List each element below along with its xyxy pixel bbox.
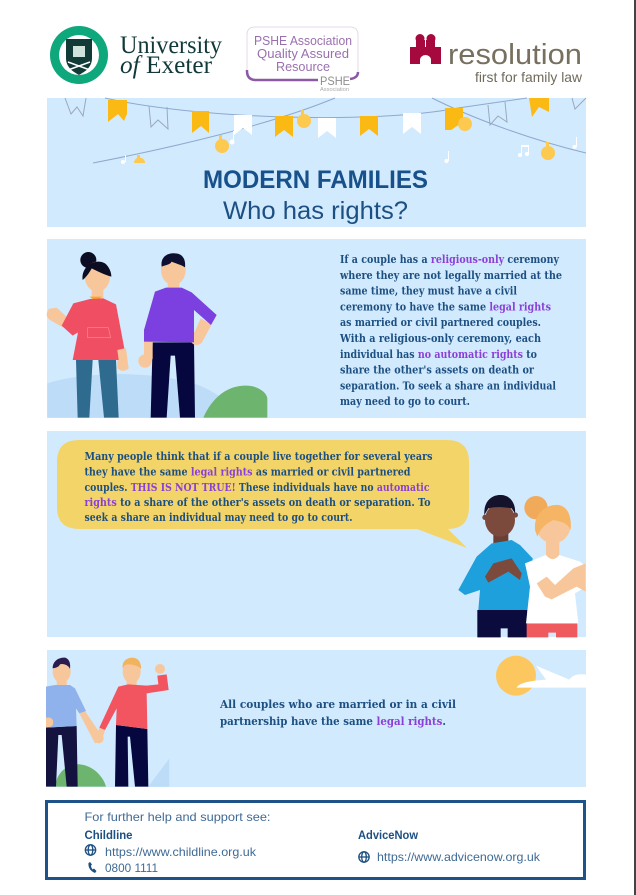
- text block: same time, they must have a civil: [340, 284, 517, 298]
- logo text: first for family law: [475, 69, 583, 85]
- AdviceNow contact: https://www.advicenow.org.uk: [377, 850, 541, 864]
- speech bubble: they have the same legal rights as married or civil partnered: [84, 466, 411, 478]
- speech bubble: [57, 440, 469, 548]
- speech bubble: rights to a share of the other's assets on death or separation. To: [84, 496, 430, 509]
- text block: individual has no automatic rights to: [340, 348, 537, 361]
- woman in white top: [524, 496, 586, 637]
- text block: as married or civil partnered couples.: [340, 316, 541, 329]
- text block: [219, 698, 456, 728]
- speech bubble: seek a share an individual may need to go to court.: [84, 511, 352, 524]
- logo text: [120, 32, 222, 79]
- man in red shirt: [95, 658, 169, 787]
- subtitle: Who has rights?: [223, 197, 408, 225]
- logo: PSHE Association: PSHE Association: [254, 33, 352, 48]
- AdviceNow contact: AdviceNow: [358, 828, 419, 842]
- text block: separation. To seek a share an individual: [340, 379, 556, 392]
- panel: married couples: [46, 650, 591, 787]
- icon: resolution figures: [410, 34, 441, 64]
- panel: title banner: [47, 98, 586, 227]
- bunting decoration: [65, 98, 586, 164]
- hills: [55, 758, 169, 787]
- text block: may need to go to court.: [340, 395, 470, 408]
- Childline contact: 0800 1111: [105, 861, 158, 875]
- panel: religious-only ceremony: [47, 239, 586, 418]
- logo: resolution: [410, 34, 583, 85]
- panel: living together myth: [47, 431, 586, 637]
- text block: ceremony to have the same legal rights: [340, 300, 551, 313]
- text block: With a religious-only ceremony, each: [339, 332, 541, 345]
- hills: [47, 374, 267, 418]
- illustration: couple with hills: [47, 252, 267, 418]
- text block: All couples who are married or in a civil: [219, 698, 456, 711]
- logo: PSHE Association: PSHE: [320, 74, 350, 88]
- man in purple shirt: [138, 253, 217, 418]
- Childline contact: https://www.childline.org.uk: [105, 845, 257, 859]
- speech bubble: couples. THIS IS NOT TRUE! These individuals have no automatic: [84, 481, 430, 494]
- heading: For further help and support see:: [84, 810, 270, 824]
- Childline contact: Childline: [84, 828, 133, 842]
- text block: If a couple has a religious-only ceremony: [340, 253, 560, 266]
- illustration: couple: [458, 495, 586, 637]
- icon: globe: [85, 845, 96, 855]
- AdviceNow contact: [358, 828, 541, 864]
- text block: share the other's assets on death or: [340, 364, 534, 377]
- man in blue jacket: [458, 495, 533, 637]
- man in blue shirt: [46, 658, 104, 787]
- woman in red top: [47, 252, 129, 418]
- title: MODERN FAMILIES: [203, 166, 428, 194]
- text block: partnership have the same legal rights.: [220, 715, 446, 728]
- logo text: University: [120, 32, 222, 59]
- logo: PSHE Association: Resource: [276, 59, 330, 74]
- icon: phone: [88, 862, 96, 873]
- logo text: of Exeter: [120, 52, 213, 79]
- icon: globe: [359, 852, 369, 862]
- logo: PSHE Association: Association: [320, 87, 349, 93]
- panel: further help: [46, 802, 584, 878]
- logo: University of Exeter: [50, 26, 222, 84]
- Childline contact: [84, 828, 257, 875]
- logo text: [448, 39, 583, 85]
- illustration: couple holding hands: [46, 658, 169, 787]
- logo: PSHE Association: [247, 27, 358, 93]
- speech bubble: Many people think that if a couple live together for several years: [84, 450, 432, 463]
- icon: sun with cloud: [496, 656, 591, 696]
- text block: [339, 253, 562, 408]
- logo text: resolution: [448, 39, 582, 71]
- text block: where they are not legally married at the: [339, 269, 562, 282]
- logo: PSHE Association: Quality Assured: [257, 46, 349, 61]
- icon: university crest: [50, 26, 108, 84]
